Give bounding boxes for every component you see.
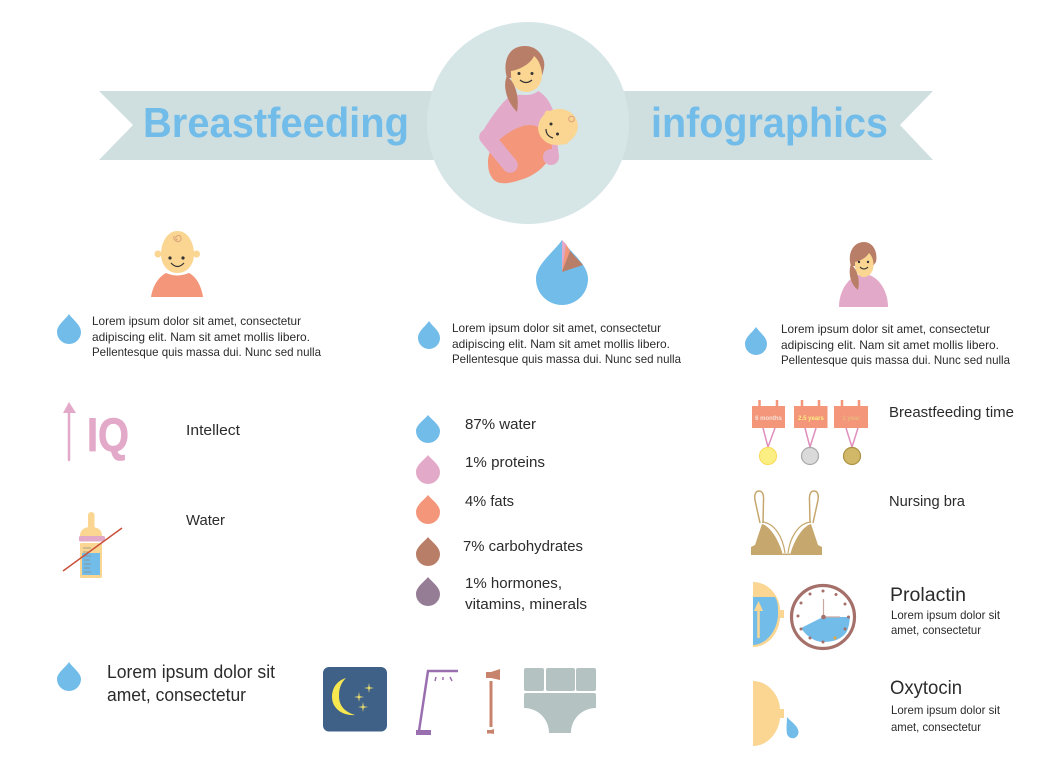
text block: bottom: amet, consectetur [107,685,246,705]
legend: milk composition [416,415,587,613]
legend item: hormones, vitamins, minerals: vitamins, minerals [465,596,587,613]
bullet drop: column 2 [418,321,440,349]
icon: crossed-out bottle [63,512,122,578]
icon: oxytocin breast with drop [753,681,799,746]
legend item: proteins [416,454,545,484]
legend item: proteins: 1% proteins [465,454,545,471]
text block: column 1: Pellentesque quis massa dui. Nunc sed nulla [92,345,321,359]
label: Breastfeeding time: Breastfeeding time [889,404,1014,421]
text block: column 3: adipiscing elit. Nam sit amet mollis libero. [781,338,999,352]
text block: column 1 [92,314,321,359]
icon: calendar medals [752,400,868,464]
calendar medal: 6 months: 6 months [755,416,782,422]
text block: Oxytocin: Oxytocin [890,678,962,699]
legend item: hormones, vitamins, minerals: 1% hormones, [465,575,562,592]
text block: column 1: adipiscing elit. Nam sit amet mollis libero. [92,330,310,344]
legend item: carbohydrates: 7% carbohydrates [463,538,583,555]
bullet drop: bottom [57,662,81,691]
legend item: water [416,415,536,443]
label: Water: Water [186,512,225,529]
label: Intellect: Intellect [186,422,241,439]
calendar medal: 2.5 years: 2.5 years [798,416,825,422]
title: infographics: infographics [651,99,888,146]
icon: night sky [323,667,387,732]
text block: column 2 [452,321,681,366]
bullet drop: column 3 [745,327,767,355]
legend item: water: 87% water [465,416,536,433]
hero circle: mother and baby [427,22,629,224]
icon: clock [792,586,854,648]
text block: column 1: Lorem ipsum dolor sit amet, consectetur [92,314,301,328]
title: Breastfeeding: Breastfeeding [143,99,409,146]
icon: IQ arrow [63,402,129,461]
legend item: fats: 4% fats [465,493,514,510]
column 1 icon: baby [151,231,203,297]
text block: column 3: Lorem ipsum dolor sit amet, consectetur [781,322,990,336]
legend item: hormones, vitamins, minerals [416,575,587,613]
text block: column 2: Pellentesque quis massa dui. Nunc sed nulla [452,352,681,366]
ribbon banner [99,91,933,160]
bullet drop: column 1 [57,314,81,344]
text block: column 3: Pellentesque quis massa dui. Nunc sed nulla [781,353,1010,367]
text block: Prolactin: amet, consectetur [891,623,981,637]
icon: nursing bra [751,491,822,555]
text block: Prolactin: Lorem ipsum dolor sit [891,608,1001,622]
legend item: carbohydrates [416,537,583,566]
text block: column 2: adipiscing elit. Nam sit amet mollis libero. [452,337,670,351]
icon: prolactin breast with arrow [753,582,784,647]
label: Nursing bra: Nursing bra [889,493,966,510]
text block: Prolactin: Prolactin [890,585,966,606]
text block: Prolactin [890,585,1001,637]
text block: Oxytocin: amet, consectetur [891,720,981,734]
icon: diaper [524,668,596,733]
icon: IQ arrow: IQ [87,408,129,461]
column 2 icon: milk composition drop [536,240,588,305]
text block: Oxytocin: Lorem ipsum dolor sit [891,703,1001,717]
text block: bottom: Lorem ipsum dolor sit [107,662,275,682]
icon: floor lamp [416,671,458,735]
column 3 icon: woman [839,242,888,307]
icon: wall light [486,669,500,734]
calendar medal: 1 year: 1 year [842,416,860,422]
text block: column 3 [781,322,1010,367]
legend item: fats [416,493,514,524]
text block: bottom [107,662,275,705]
text block: Oxytocin [890,678,1001,734]
text block: column 2: Lorem ipsum dolor sit amet, consectetur [452,321,661,335]
